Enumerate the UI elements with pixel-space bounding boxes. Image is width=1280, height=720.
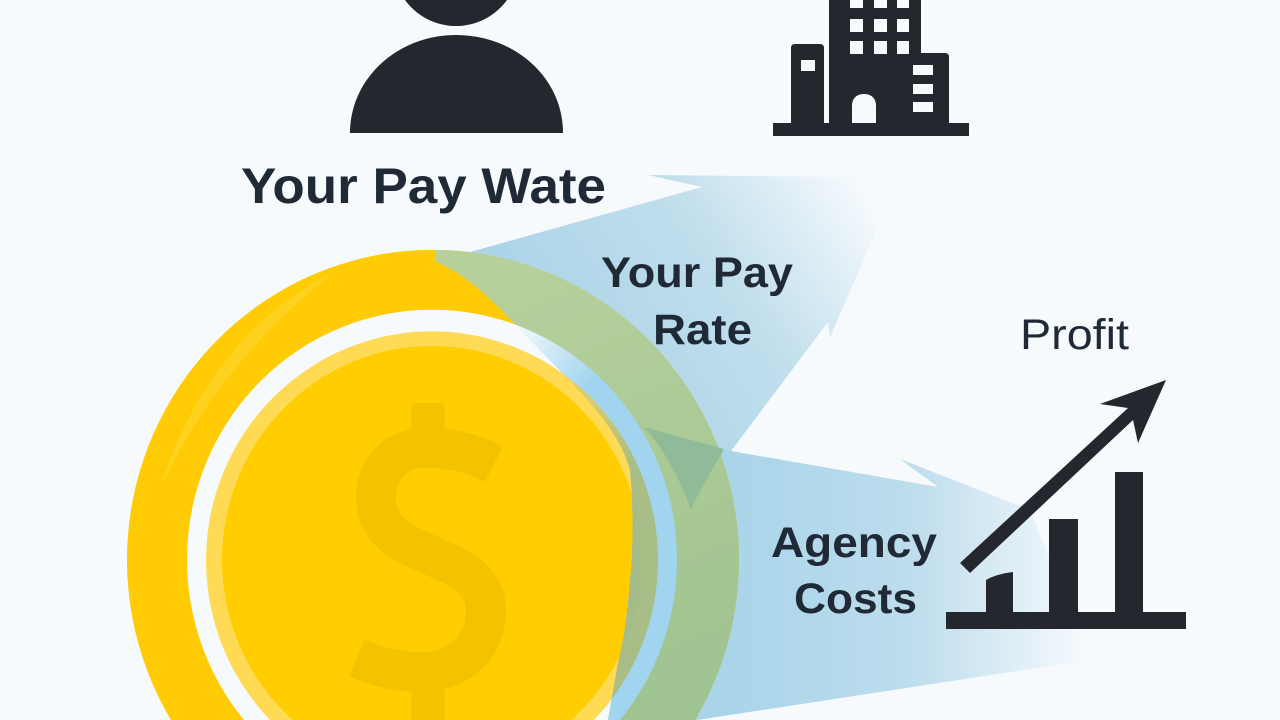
arrow: lower blue arrow toward profit chart — [600, 428, 1090, 720]
label: your pay rate — [601, 249, 793, 354]
coin light yellow ring — [206, 331, 658, 720]
heading: your pay wate: Your Pay Wate — [241, 158, 606, 214]
dollar sign — [357, 403, 494, 720]
darker overlap triangle — [644, 427, 724, 509]
icon: gold dollar coin — [127, 250, 739, 720]
label: your pay rate: Your Pay — [601, 249, 793, 297]
icon: person — [350, 0, 563, 133]
coin outer rim — [127, 250, 739, 720]
arrow: upper blue arrow toward building — [470, 175, 876, 455]
label: agency costs: Agency — [771, 519, 937, 567]
label: agency costs: Costs — [794, 575, 917, 623]
coin inner face — [222, 346, 642, 720]
translucent crescent overlap — [436, 250, 739, 720]
coin rim highlight — [160, 272, 335, 490]
label: your pay rate: Rate — [653, 306, 752, 354]
label: profit: Profit — [1020, 311, 1129, 359]
label: agency costs — [771, 519, 937, 623]
coin white ring — [187, 310, 677, 720]
icon: building — [773, 0, 969, 136]
icon: profit bar chart with arrow — [946, 380, 1186, 629]
